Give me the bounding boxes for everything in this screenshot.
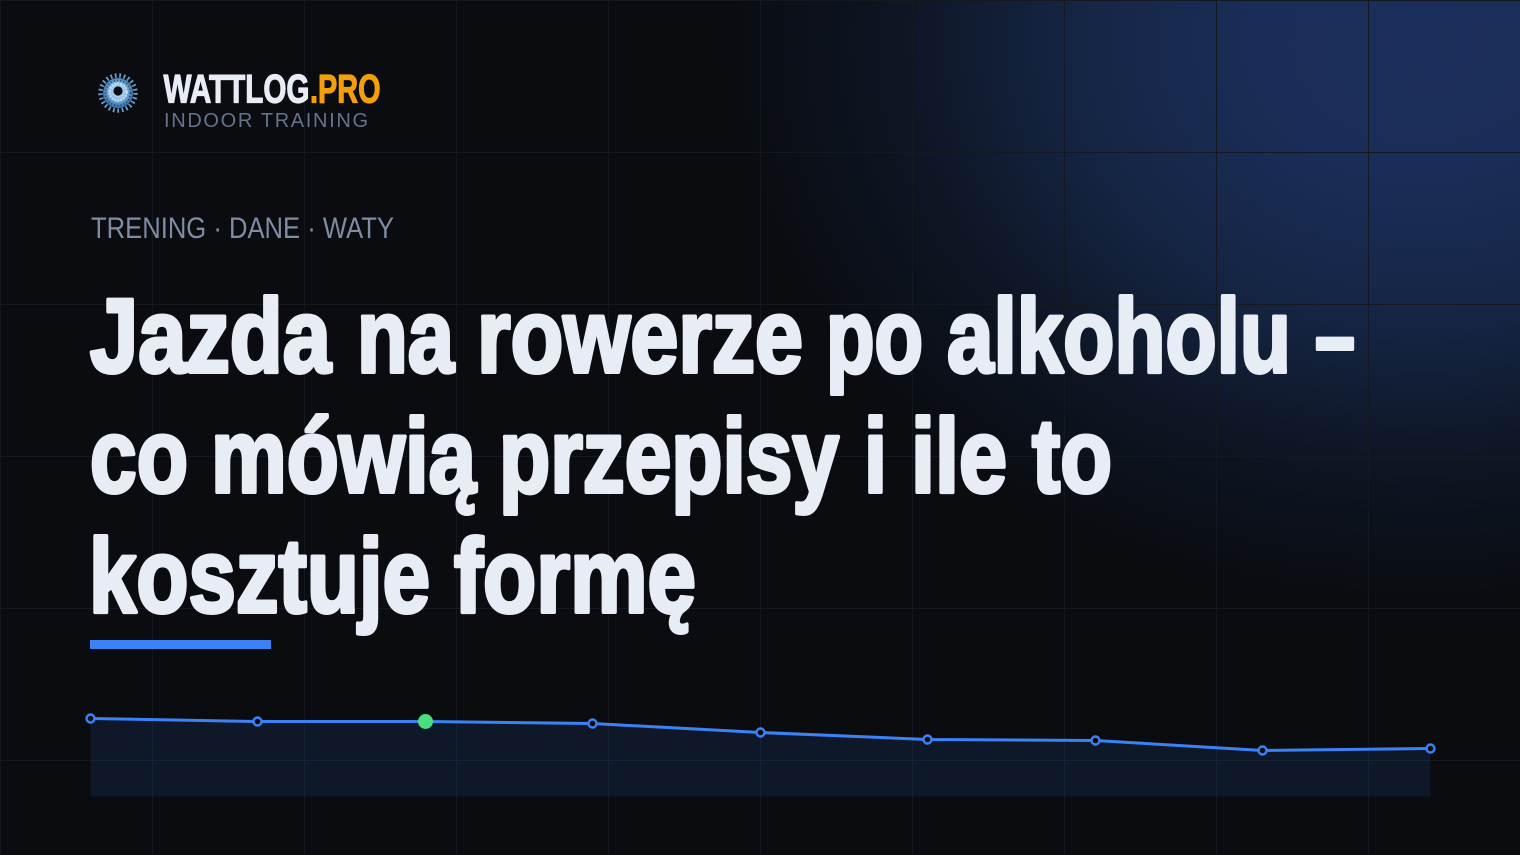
title (89, 278, 1355, 635)
title: mówią (211, 398, 477, 515)
icon: cassette gear (100, 76, 136, 110)
tagline: INDOOR TRAINING (164, 110, 368, 132)
title: i (864, 398, 887, 515)
title: formę (454, 518, 696, 635)
title: rowerze (477, 278, 803, 395)
title: Jazda (90, 278, 332, 395)
wordmark: WATTLOG (164, 68, 310, 112)
wordmark: .PRO (310, 68, 380, 112)
title: – (1315, 278, 1355, 395)
chart line (90, 718, 1430, 750)
title: co (90, 398, 188, 515)
title: po (826, 278, 923, 395)
title: alkoholu (947, 278, 1291, 395)
chart points (86, 714, 1434, 754)
logo (100, 68, 380, 132)
title: kosztuje (89, 518, 430, 635)
eyebrow: TRENING · DANE · WATY (91, 212, 394, 245)
title underline accent (90, 640, 271, 649)
title: przepisy (499, 398, 839, 515)
line chart (86, 714, 1434, 796)
highlighted point (418, 714, 433, 729)
title: ile (911, 398, 1007, 515)
chart area fill (90, 718, 1430, 796)
title: to (1032, 398, 1112, 515)
title: na (357, 278, 455, 395)
